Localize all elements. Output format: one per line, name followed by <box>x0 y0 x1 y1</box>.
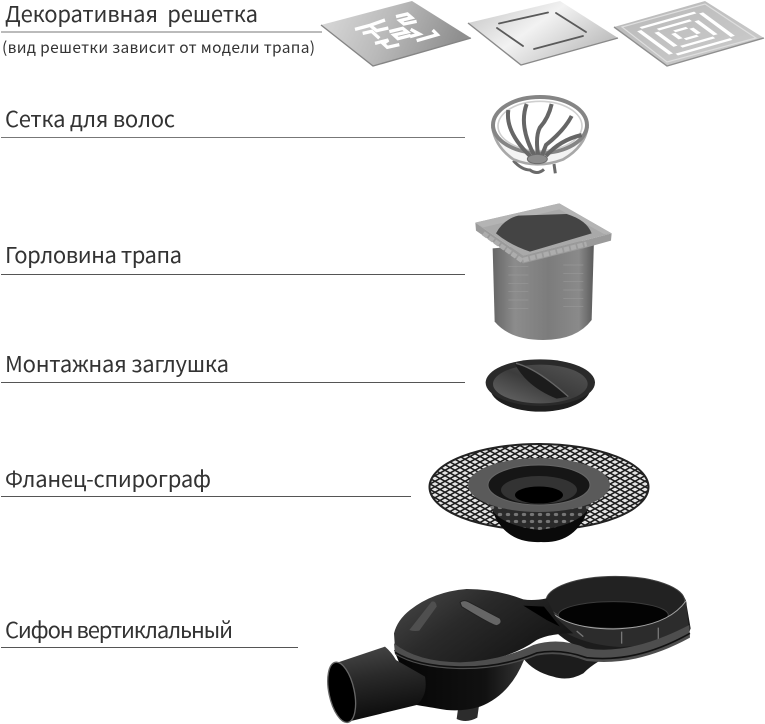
icon: drain neck <box>475 203 612 340</box>
heading: mounting plug: Монтажная заглушка <box>5 347 229 379</box>
icon: grille with knot pattern <box>321 1 471 66</box>
heading: vertical siphon: Сифон вертиклальный <box>5 613 233 645</box>
heading: hair strainer: Сетка для волос <box>5 102 175 134</box>
icon: vertical siphon <box>323 576 691 724</box>
icon: hair strainer basket <box>492 97 588 173</box>
icon: spirograph flange <box>430 444 648 542</box>
note: grille depends on model: (вид решетки зависит от модели трапа) <box>2 36 315 58</box>
heading: drain neck: Горловина трапа <box>5 238 182 270</box>
heading: spirograph flange: Фланец-спирограф <box>5 462 211 494</box>
icon: grille with concentric slots <box>614 1 764 66</box>
icon: grille with square slot <box>468 1 618 65</box>
icon: mounting plug <box>486 359 595 412</box>
